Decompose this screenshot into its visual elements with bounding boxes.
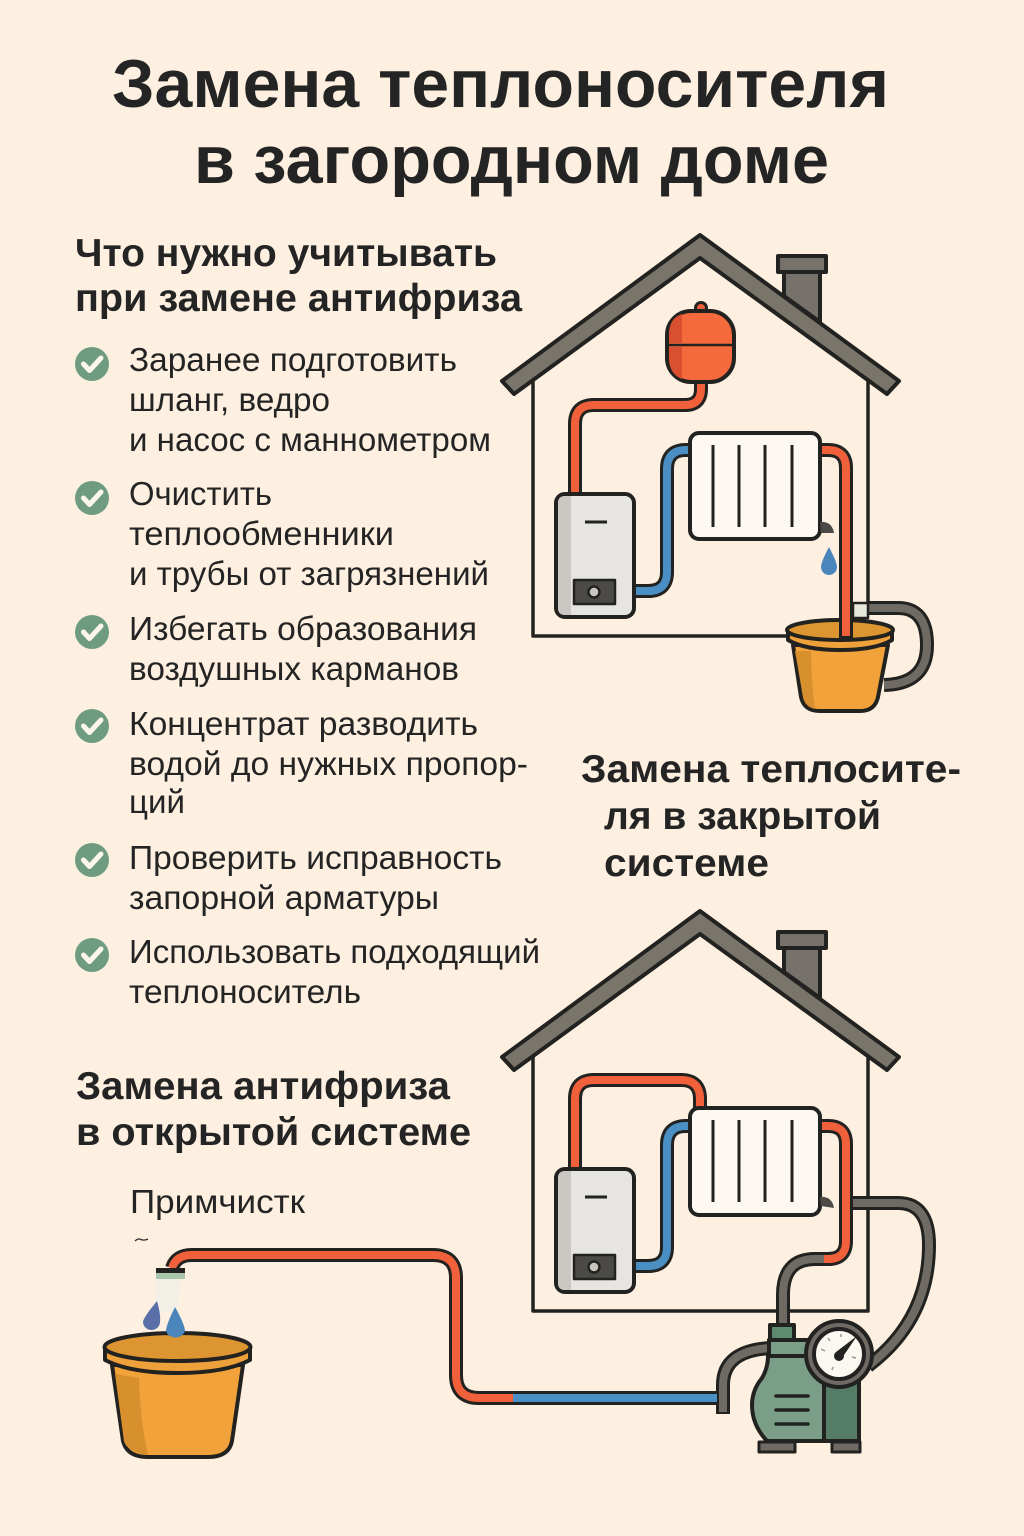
item 1: и насос с маннометром (129, 421, 491, 458)
item 4 (75, 705, 528, 820)
item 1: шланг, ведро (129, 381, 330, 418)
item 5: запорной арматуры (129, 879, 439, 916)
checklist (75, 341, 540, 1010)
radiator (690, 1108, 834, 1215)
heading: closed system (581, 748, 961, 885)
water drops (143, 1301, 185, 1338)
pump outlet hose (723, 1348, 772, 1414)
item 5: Проверить исправность (129, 839, 502, 876)
roof (502, 235, 899, 394)
heading: what to consider: Что нужно учитывать (75, 232, 497, 275)
item 3 (75, 610, 477, 687)
pressure gauge (806, 1321, 872, 1387)
item 5 (75, 839, 502, 916)
return pipe (633, 1126, 692, 1266)
red outlet pipe (818, 1126, 846, 1259)
nozzle (155, 1268, 185, 1312)
pump (752, 1321, 872, 1452)
note text: Примчистк (130, 1183, 306, 1220)
heading: what to consider: при замене антифриза (75, 277, 522, 320)
lower house diagram (502, 911, 929, 1452)
item 6: Использовать подходящий (129, 933, 540, 970)
supply pipe (575, 1080, 700, 1170)
roof (502, 911, 899, 1070)
title: в загородном доме (194, 122, 829, 198)
item 4: ций (129, 783, 185, 820)
heading: what to consider (75, 232, 522, 320)
title (112, 46, 889, 198)
house walls (533, 380, 868, 636)
heading: closed system: Замена теплосите- (581, 748, 961, 791)
pump inlet hose (783, 1259, 824, 1328)
house walls (533, 1056, 868, 1311)
boiler (556, 494, 634, 617)
bucket (787, 620, 893, 711)
drain pipe (172, 1255, 717, 1398)
item 4: Концентрат разводить (129, 705, 478, 742)
expansion tank pipe (575, 380, 701, 497)
heading: open system (76, 1065, 471, 1154)
item 6 (75, 933, 540, 1010)
radiator (690, 433, 834, 539)
water drop (821, 547, 837, 575)
chimney (778, 932, 826, 998)
item 2 (75, 475, 489, 592)
item 6: теплоноситель (129, 973, 361, 1010)
item 1: Заранее подготовить (129, 341, 457, 378)
item 4: водой до нужных пропор- (129, 745, 528, 782)
upper house diagram (502, 235, 927, 711)
title: Замена теплоносителя (112, 46, 889, 122)
return hose (853, 1203, 929, 1366)
heading: open system: Замена антифриза (76, 1065, 450, 1108)
item 2: Очистить (129, 475, 272, 512)
item 3: Избегать образования (129, 610, 477, 647)
open bucket with nozzle (104, 1268, 250, 1457)
item 2: и трубы от загрязнений (129, 555, 489, 592)
heading: closed system: ля в закрытой (604, 795, 881, 838)
heading: open system: в открытой системе (76, 1111, 471, 1154)
heading: closed system: системе (604, 842, 769, 885)
drain hose (853, 603, 927, 685)
bucket body (104, 1333, 250, 1457)
item 1 (75, 341, 491, 458)
item 2: теплообменники (129, 515, 394, 552)
supply pipe to bucket (818, 450, 846, 638)
chimney (778, 256, 826, 322)
boiler (556, 1169, 634, 1292)
expansion tank (667, 302, 734, 382)
return pipe (633, 450, 692, 591)
item 3: воздушных карманов (129, 650, 459, 687)
